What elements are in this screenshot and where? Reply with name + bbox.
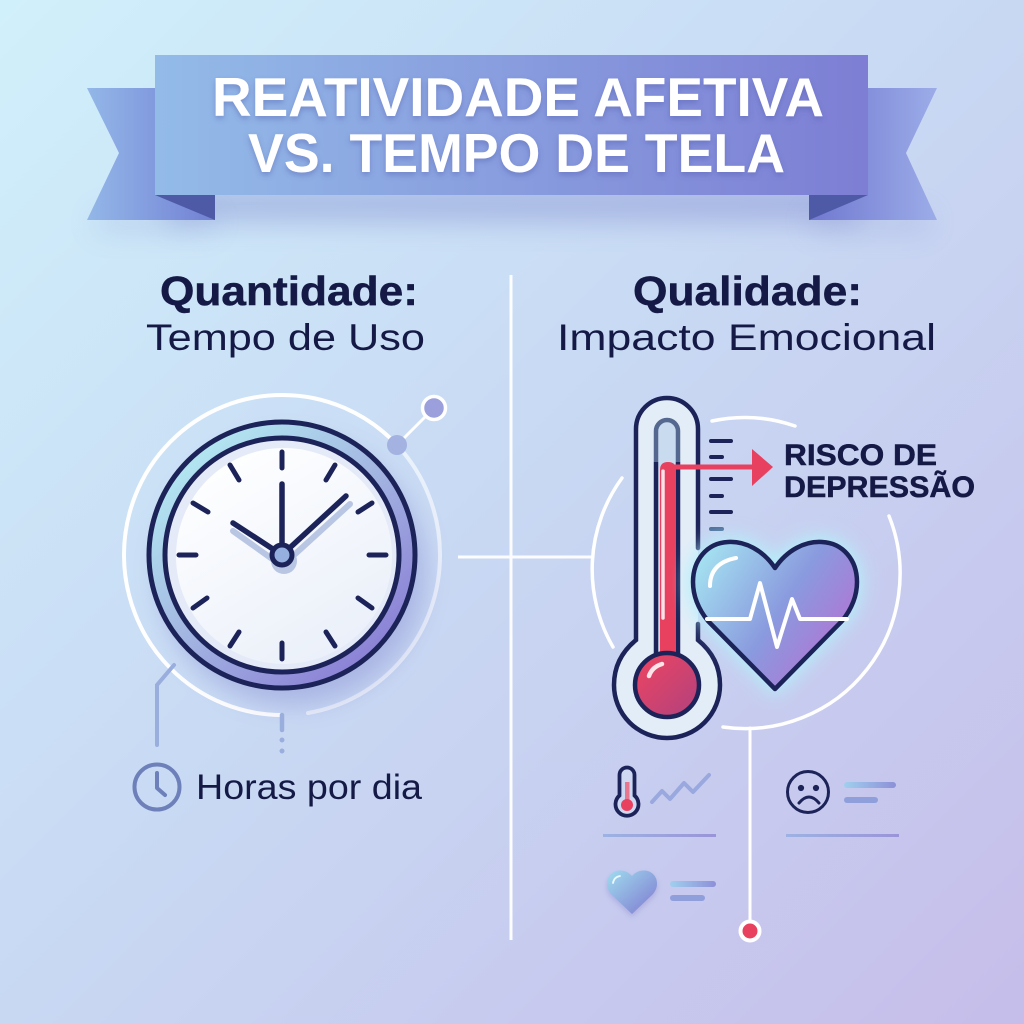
thermometer scale — [711, 441, 731, 529]
heading: qualidade: Impacto Emocional — [557, 317, 936, 358]
clock hands — [233, 484, 346, 555]
heading: quantidade — [146, 268, 425, 358]
clock callout lines — [157, 665, 284, 752]
red end dot — [740, 922, 760, 940]
label: risco de depressao — [784, 439, 975, 504]
text placeholder bars: heart — [670, 881, 716, 901]
banner left fold — [155, 195, 215, 220]
clock — [149, 422, 426, 706]
heart with pulse — [693, 542, 857, 689]
clock hub — [272, 545, 292, 565]
banner right tail — [809, 88, 937, 220]
pulse line — [707, 583, 847, 647]
title text: REATIVIDADE AFETIVA — [212, 66, 824, 128]
thermometer mercury — [660, 462, 676, 660]
text placeholder bars: face — [844, 782, 896, 803]
label: risco de depressao: DEPRESSÃO — [784, 470, 975, 504]
banner right fold — [809, 195, 868, 220]
chart: small trend line — [652, 775, 709, 802]
heading: quantidade: Tempo de Uso — [146, 317, 425, 358]
divider: left row — [603, 834, 716, 837]
thermometer inner tube — [656, 420, 678, 654]
title text — [212, 66, 824, 184]
divider: right row — [786, 834, 899, 837]
clock ticks — [179, 452, 386, 659]
label: risco de depressao: RISCO DE — [784, 439, 937, 472]
icon: small heart — [607, 870, 657, 917]
clock hand shadows — [233, 504, 350, 566]
label: horas por dia: Horas por dia — [196, 768, 423, 807]
clock outer ring — [124, 395, 440, 715]
thermometer glass — [614, 398, 720, 738]
icon: small clock — [134, 764, 180, 810]
clock connector dots — [387, 396, 446, 455]
icon: sad face — [788, 772, 828, 812]
title text: VS. TEMPO DE TELA — [248, 122, 785, 184]
arrow: risk — [662, 449, 773, 486]
center divider — [458, 275, 592, 940]
banner body — [155, 55, 868, 195]
icon: small thermometer — [616, 768, 639, 816]
banner left tail — [87, 88, 215, 220]
title banner — [87, 55, 937, 232]
heart-thermometer ring — [592, 418, 900, 920]
heart highlight — [710, 558, 736, 586]
heading: qualidade: Qualidade: — [633, 268, 862, 314]
heading: quantidade: Quantidade: — [160, 268, 418, 314]
thermometer — [614, 398, 731, 738]
thermometer bulb — [635, 653, 699, 717]
heading: qualidade — [557, 268, 936, 358]
